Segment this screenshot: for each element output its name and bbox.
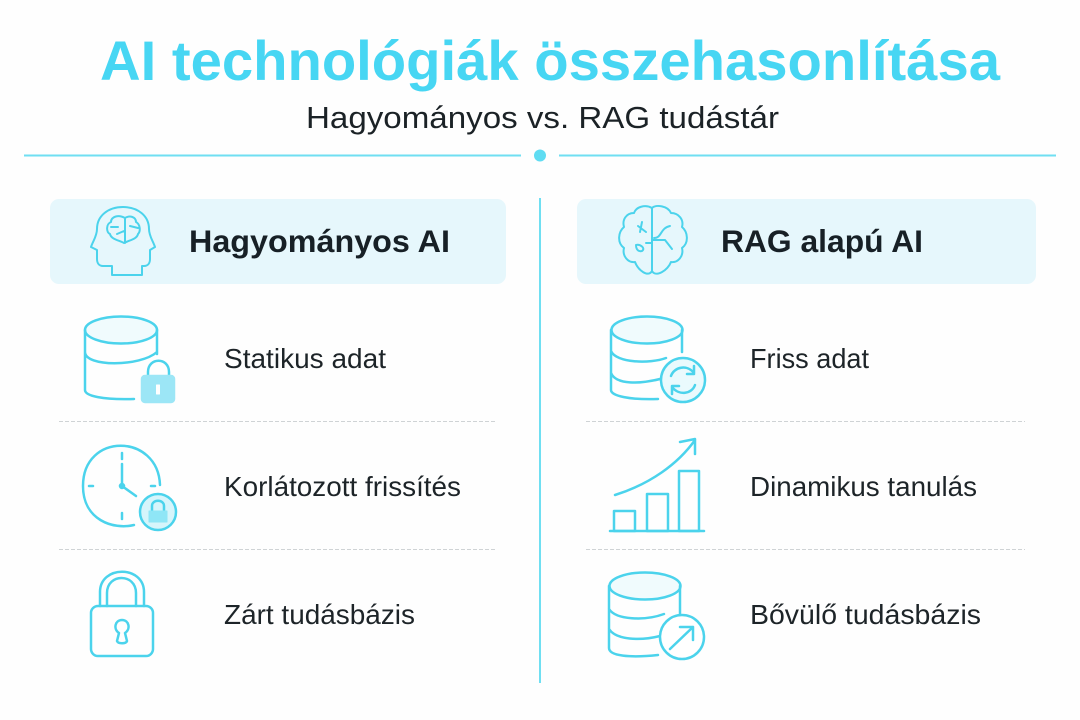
row divider left 2 [59, 548, 496, 550]
icon: database with expand arrow [609, 572, 704, 659]
label: Korlátozott frissítés [224, 471, 461, 502]
heading: RAG alapú AI [721, 223, 923, 259]
label: Friss adat [750, 343, 869, 374]
icon: brain network [619, 206, 687, 274]
icon: head with brain [91, 207, 155, 275]
subtitle: Hagyományos vs. RAG tudástár [306, 100, 779, 135]
heading: Hagyományos AI [189, 223, 450, 259]
label: Bővülő tudásbázis [750, 599, 981, 630]
icon: growth bar chart [610, 439, 704, 531]
row divider left 1 [59, 420, 496, 422]
header band left [50, 199, 506, 284]
row divider right 2 [586, 548, 1025, 550]
header band right [577, 199, 1036, 284]
panel: Hagyományos AI [50, 199, 506, 284]
icon: database with refresh [611, 316, 705, 402]
center column divider [539, 198, 541, 683]
icon: database with lock [85, 316, 174, 402]
label: Statikus adat [224, 343, 386, 374]
label: Dinamikus tanulás [750, 471, 977, 502]
row divider right 1 [586, 420, 1025, 422]
panel: RAG alapú AI [577, 199, 1036, 284]
label: Zárt tudásbázis [224, 599, 415, 630]
title divider with dot [24, 150, 1056, 162]
icon: padlock [91, 572, 153, 656]
title: AI technológiák összehasonlítása [100, 29, 1001, 92]
icon: clock with lock [83, 446, 176, 530]
